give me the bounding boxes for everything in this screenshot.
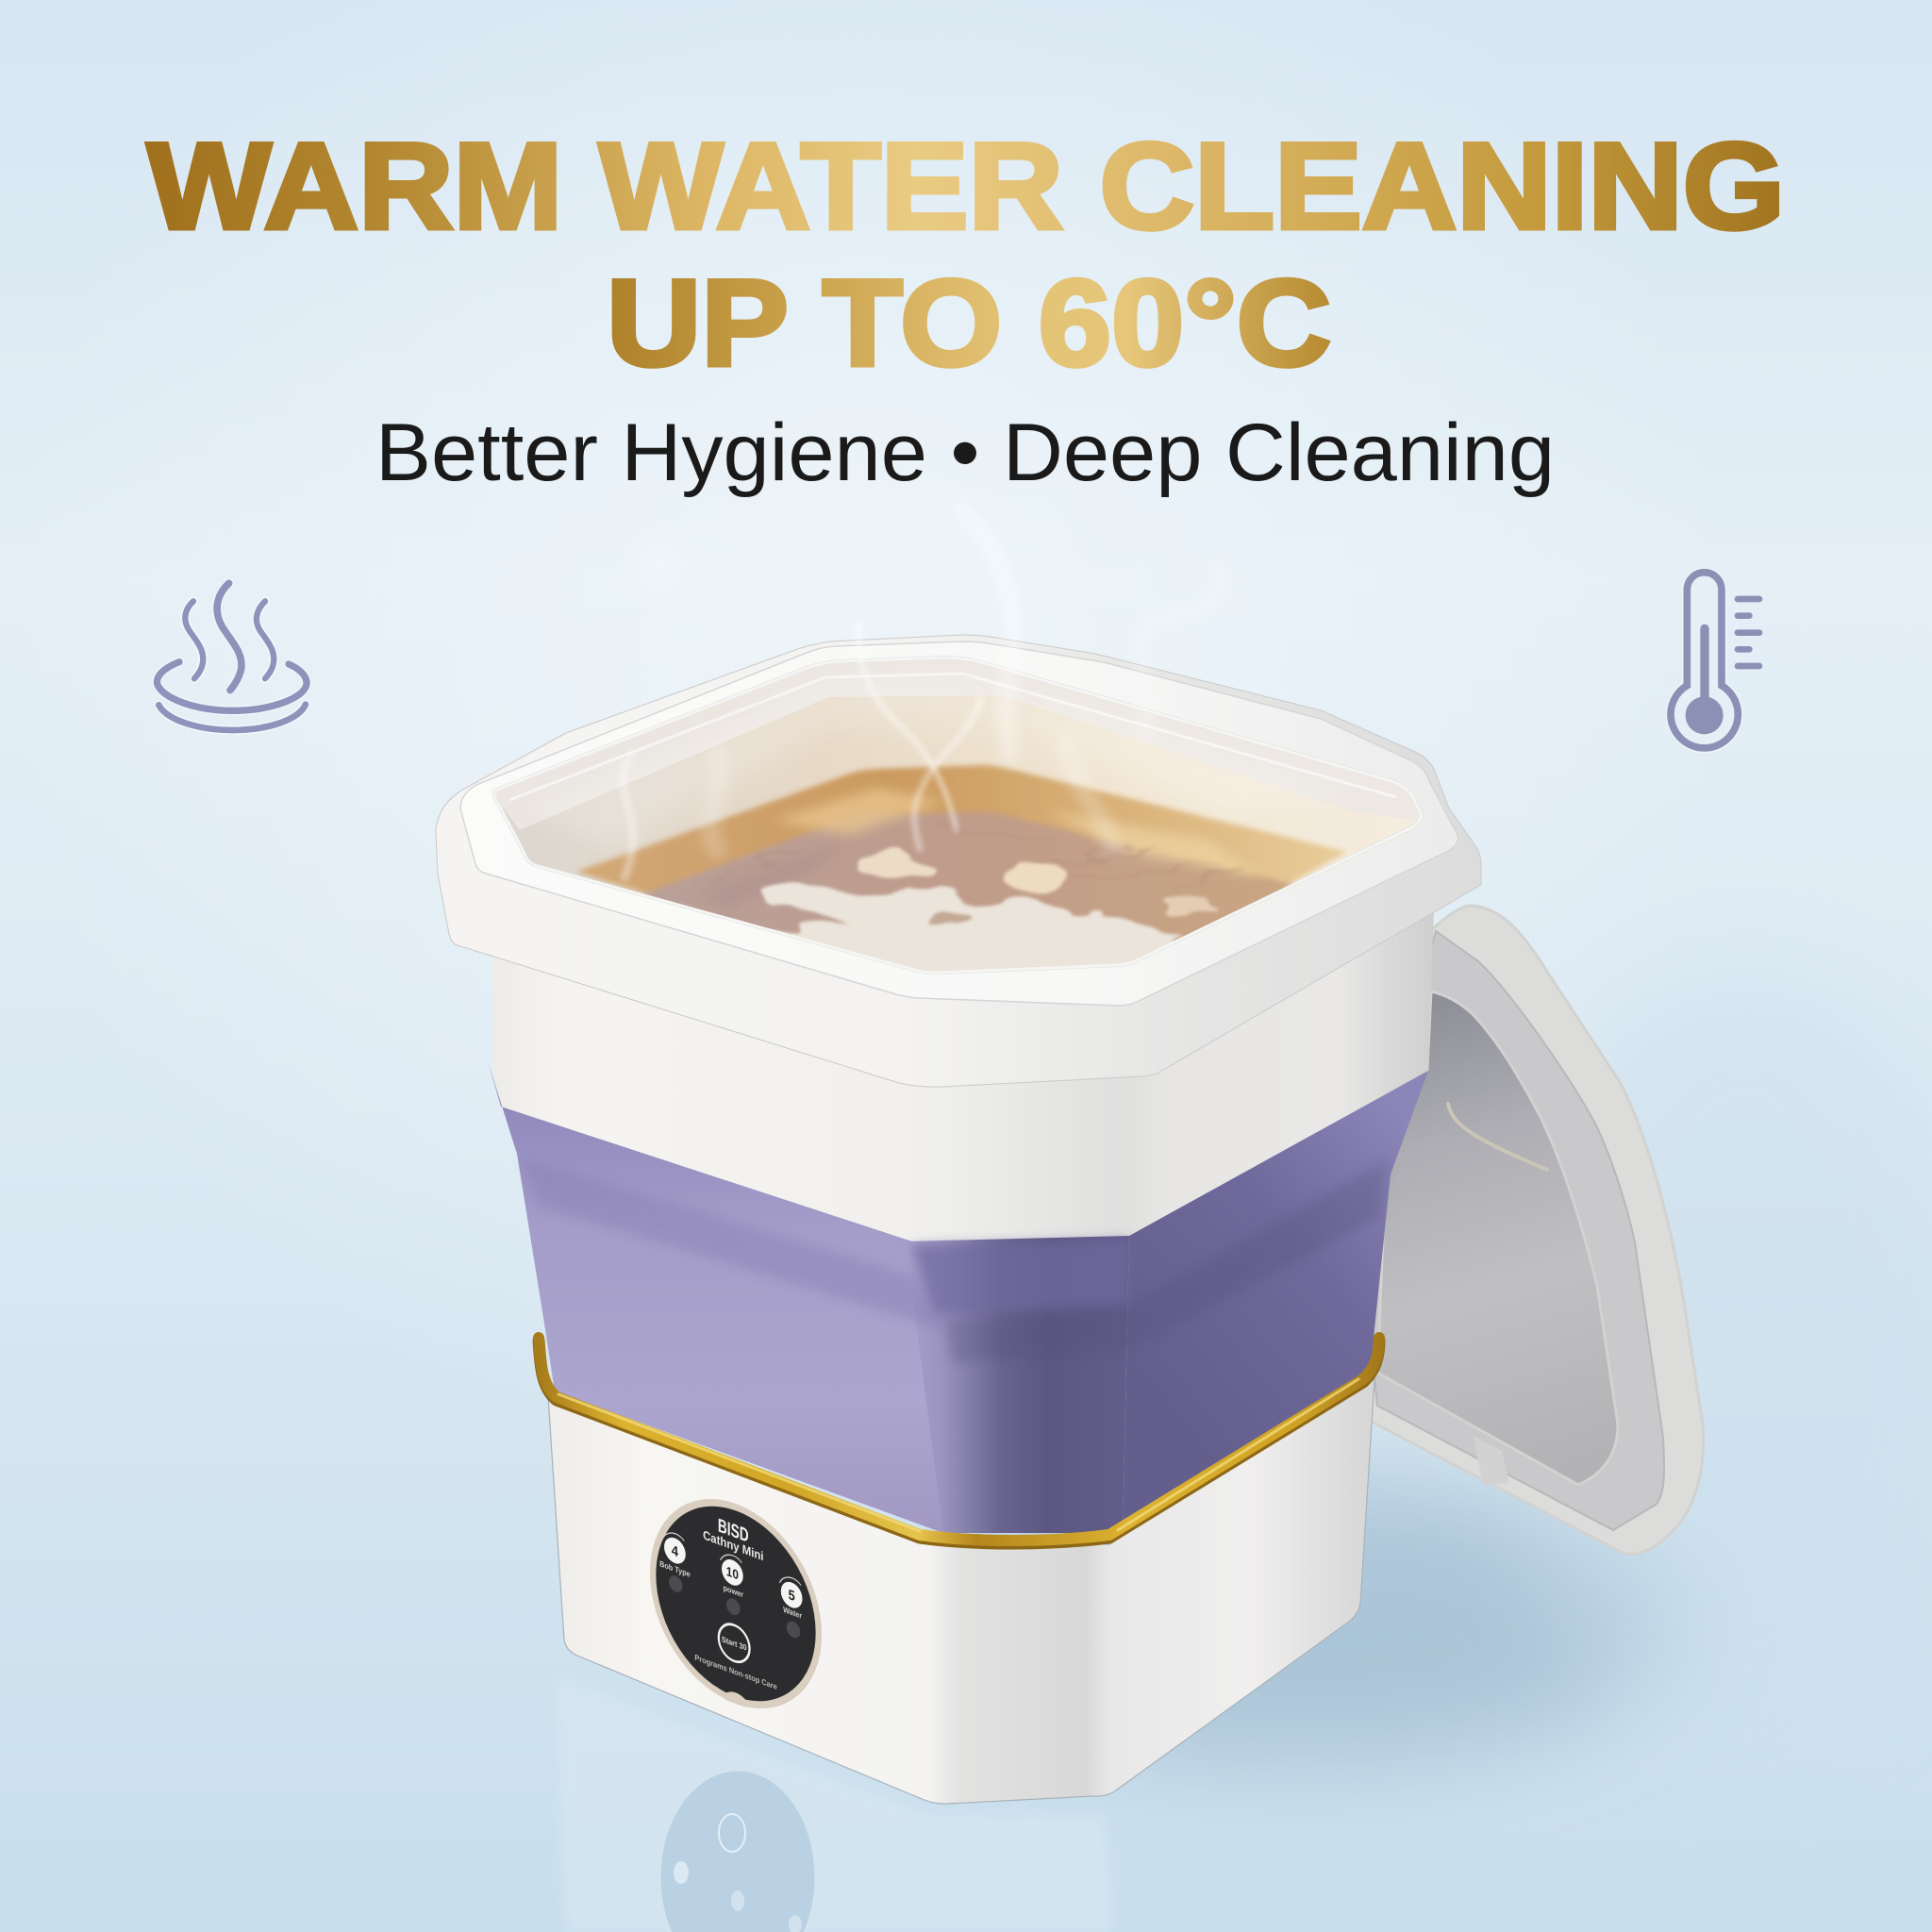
upper rim lip — [460, 641, 1458, 1006]
panel small print: Programs Non-stop Care — [694, 1653, 777, 1691]
dial: water 5: Water — [783, 1605, 803, 1621]
subtitle: Better Hygiene • Deep Cleaning — [375, 408, 1555, 498]
dial: power 10 — [721, 1551, 744, 1619]
icon: steam over hot surface — [157, 583, 307, 730]
rising steam — [623, 509, 1221, 877]
warm water and inner ledge, clipped to the opening — [491, 655, 1424, 986]
opening walls — [494, 658, 1421, 973]
heading — [147, 117, 1785, 498]
brand logo: BISD — [718, 1515, 749, 1547]
start button: Start 30 — [722, 1635, 747, 1653]
dial: power 10: power — [724, 1583, 744, 1600]
back ledge — [491, 655, 1424, 830]
icon: thermometer — [1671, 573, 1759, 748]
title line 1: WARM WATER CLEANING — [147, 117, 1785, 255]
white base — [548, 1379, 1374, 1804]
gold ring — [539, 1338, 1379, 1543]
dial: bucket type 4: 4 — [672, 1542, 678, 1561]
start button — [719, 1620, 750, 1667]
title line 2: UP TO 60°C — [607, 254, 1331, 391]
purple collapsible silicone section — [488, 1061, 1428, 1533]
rim and opening — [436, 635, 1481, 1087]
lid hinge tab — [1474, 1436, 1509, 1486]
dial: bucket type 4: Bob Type — [659, 1559, 691, 1579]
open lid leaning behind — [1358, 906, 1704, 1555]
model name: Cathny Mini — [703, 1528, 763, 1564]
warm water surface — [576, 765, 1347, 986]
haze over the back wall — [570, 696, 1213, 833]
control panel — [650, 1473, 822, 1735]
inner rim highlight — [494, 658, 1421, 973]
floor reflection of the washer — [557, 1679, 1113, 1932]
upper white body — [492, 906, 1434, 1242]
dial: water 5 — [779, 1574, 803, 1641]
product: foldable washer — [436, 509, 1704, 1804]
lower rim band — [436, 635, 1481, 1087]
dial: water 5: 5 — [789, 1587, 795, 1606]
dial: power 10: 10 — [726, 1563, 739, 1583]
dial: bucket type 4 — [659, 1528, 691, 1597]
